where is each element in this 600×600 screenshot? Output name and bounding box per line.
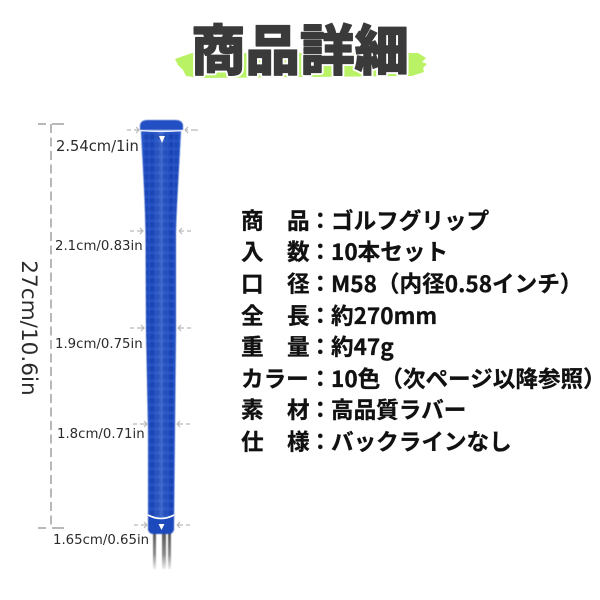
spec row: style: バックラインなし [331, 424, 512, 457]
spec row: length: 全 [241, 298, 264, 331]
spec row: bore: 口 [241, 266, 264, 299]
spec row: material: ： [309, 392, 332, 425]
spec row: material: 素 [241, 392, 264, 425]
spec row: style: 仕 [241, 424, 264, 457]
title text: 商品詳細 [191, 7, 409, 86]
total length label: 27cm/10.6in [16, 260, 41, 396]
spec row: bore: 径 [287, 266, 310, 299]
bottom triangle marker [158, 524, 164, 530]
width arrows [127, 127, 198, 528]
spec row: color: カラー [241, 361, 309, 394]
spec row: color: ： [309, 361, 332, 394]
spec row: length [241, 298, 437, 331]
diameter label: lower: 1.8cm/0.71in [57, 427, 145, 442]
spec row: length: 長 [287, 298, 310, 331]
height dimension line [38, 124, 64, 528]
spec row: weight [241, 329, 394, 362]
spec row: length: ： [309, 298, 332, 331]
spec row: material: 材 [287, 392, 310, 425]
grip cap line [140, 130, 183, 132]
diameter label: bottom: 1.65cm/0.65in [53, 533, 149, 548]
spec row: quantity: ： [309, 234, 332, 267]
title text outline: 商品詳細 [191, 7, 409, 86]
spec list [241, 203, 600, 457]
spec row: weight: 重 [241, 329, 264, 362]
spec row: product [241, 203, 489, 236]
spec row: style [241, 424, 512, 457]
top triangle marker [159, 136, 165, 143]
spec row: length: 約270mm [331, 298, 437, 331]
spec row: material [241, 392, 466, 425]
grip collar line [148, 515, 174, 518]
shaft [153, 532, 171, 569]
spec row: color: 10色（次ページ以降参照） [331, 361, 600, 394]
spec row: material: 高品質ラバー [331, 392, 466, 425]
diameter label: top: 2.54cm/1in [56, 138, 139, 155]
spec row: style: 様 [287, 424, 310, 457]
spec row: quantity: 数 [287, 234, 310, 267]
spec row: bore: M58（内径0.58インチ） [331, 266, 582, 299]
spec row: product: 品 [287, 203, 310, 236]
spec row: style: ： [309, 424, 332, 457]
spec row: weight: 量 [287, 329, 310, 362]
spec row: product: 商 [241, 203, 264, 236]
spec row: quantity: 入 [241, 234, 264, 267]
spec row: bore: ： [309, 266, 332, 299]
spec row: weight: ： [309, 329, 332, 362]
spec row: quantity [241, 234, 448, 267]
title [175, 7, 427, 86]
diameter label: middle: 1.9cm/0.75in [55, 337, 143, 352]
grip body [140, 120, 183, 534]
spec row: product: ゴルフグリップ [331, 203, 489, 236]
diameter label: upper: 2.1cm/0.83in [55, 239, 143, 254]
spec row: quantity: 10本セット [331, 234, 448, 267]
spec row: weight: 約47g [331, 329, 394, 362]
spec row: product: ： [309, 203, 332, 236]
green brush stroke [175, 53, 427, 78]
